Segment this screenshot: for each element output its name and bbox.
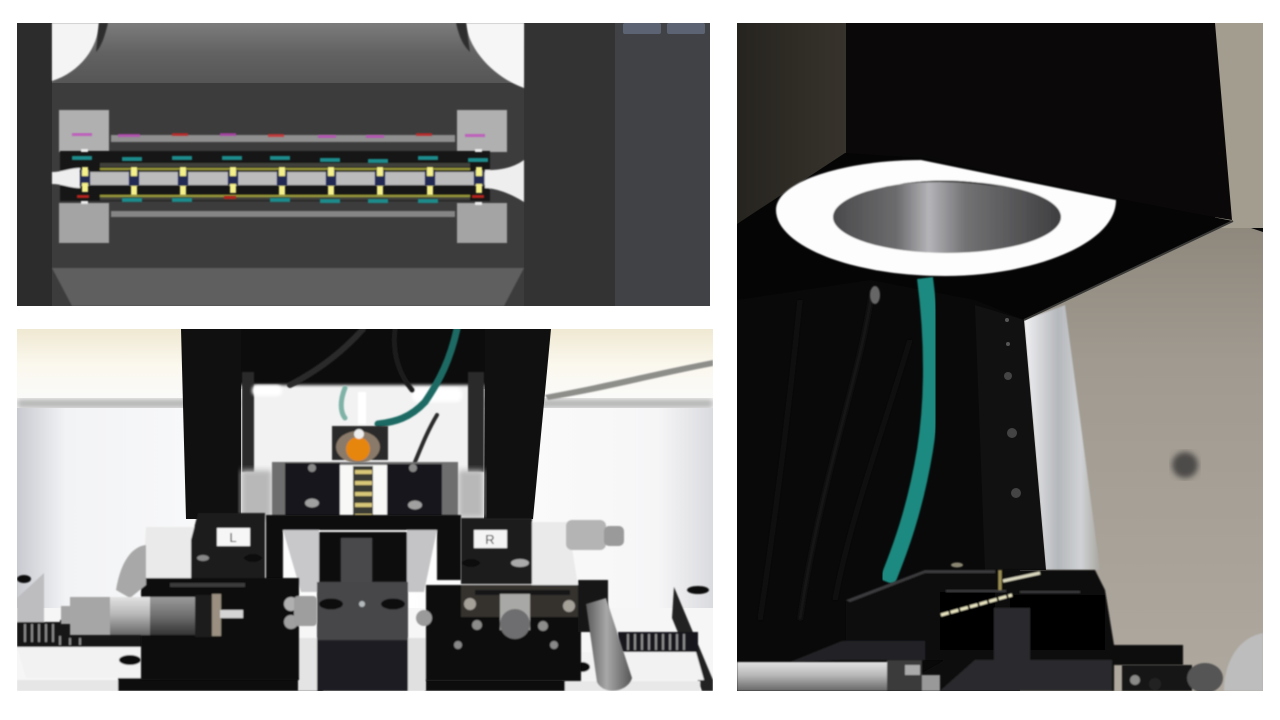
background cables: [799, 298, 872, 619]
teal hose: [887, 278, 931, 582]
left micrometer carriage: L: [229, 530, 237, 545]
ring light hood: [737, 23, 1233, 320]
dovetail fixture with pins: [790, 562, 1183, 691]
black overhead columns: [181, 329, 551, 519]
terminal markers: [72, 149, 488, 205]
connector strip under inspection: [52, 151, 524, 202]
right micrometer thimble: [586, 598, 632, 691]
foreground micrometers: [737, 633, 1263, 693]
teal hoses: [290, 329, 457, 462]
background wall: [1020, 23, 1263, 691]
panel: fixture stage photograph: [17, 329, 713, 691]
rails and toothed racks: [17, 573, 713, 691]
right micrometer carriage: R: [485, 532, 495, 547]
vision stage plates: [271, 461, 459, 516]
gauge blocks: [59, 110, 507, 243]
right micrometer carriage: [416, 518, 624, 681]
left micrometer carriage: [61, 513, 317, 680]
toolbar buttons: [623, 23, 705, 34]
central black frame and pusher: [266, 515, 461, 691]
panel: machine vision inspection screenshot: [17, 23, 710, 306]
panel: ring light photograph: [737, 23, 1263, 693]
glowing ring: [776, 160, 1116, 276]
measurement labels: [72, 133, 485, 138]
perforated column: [1004, 318, 1046, 570]
orange camera part: [332, 392, 388, 463]
